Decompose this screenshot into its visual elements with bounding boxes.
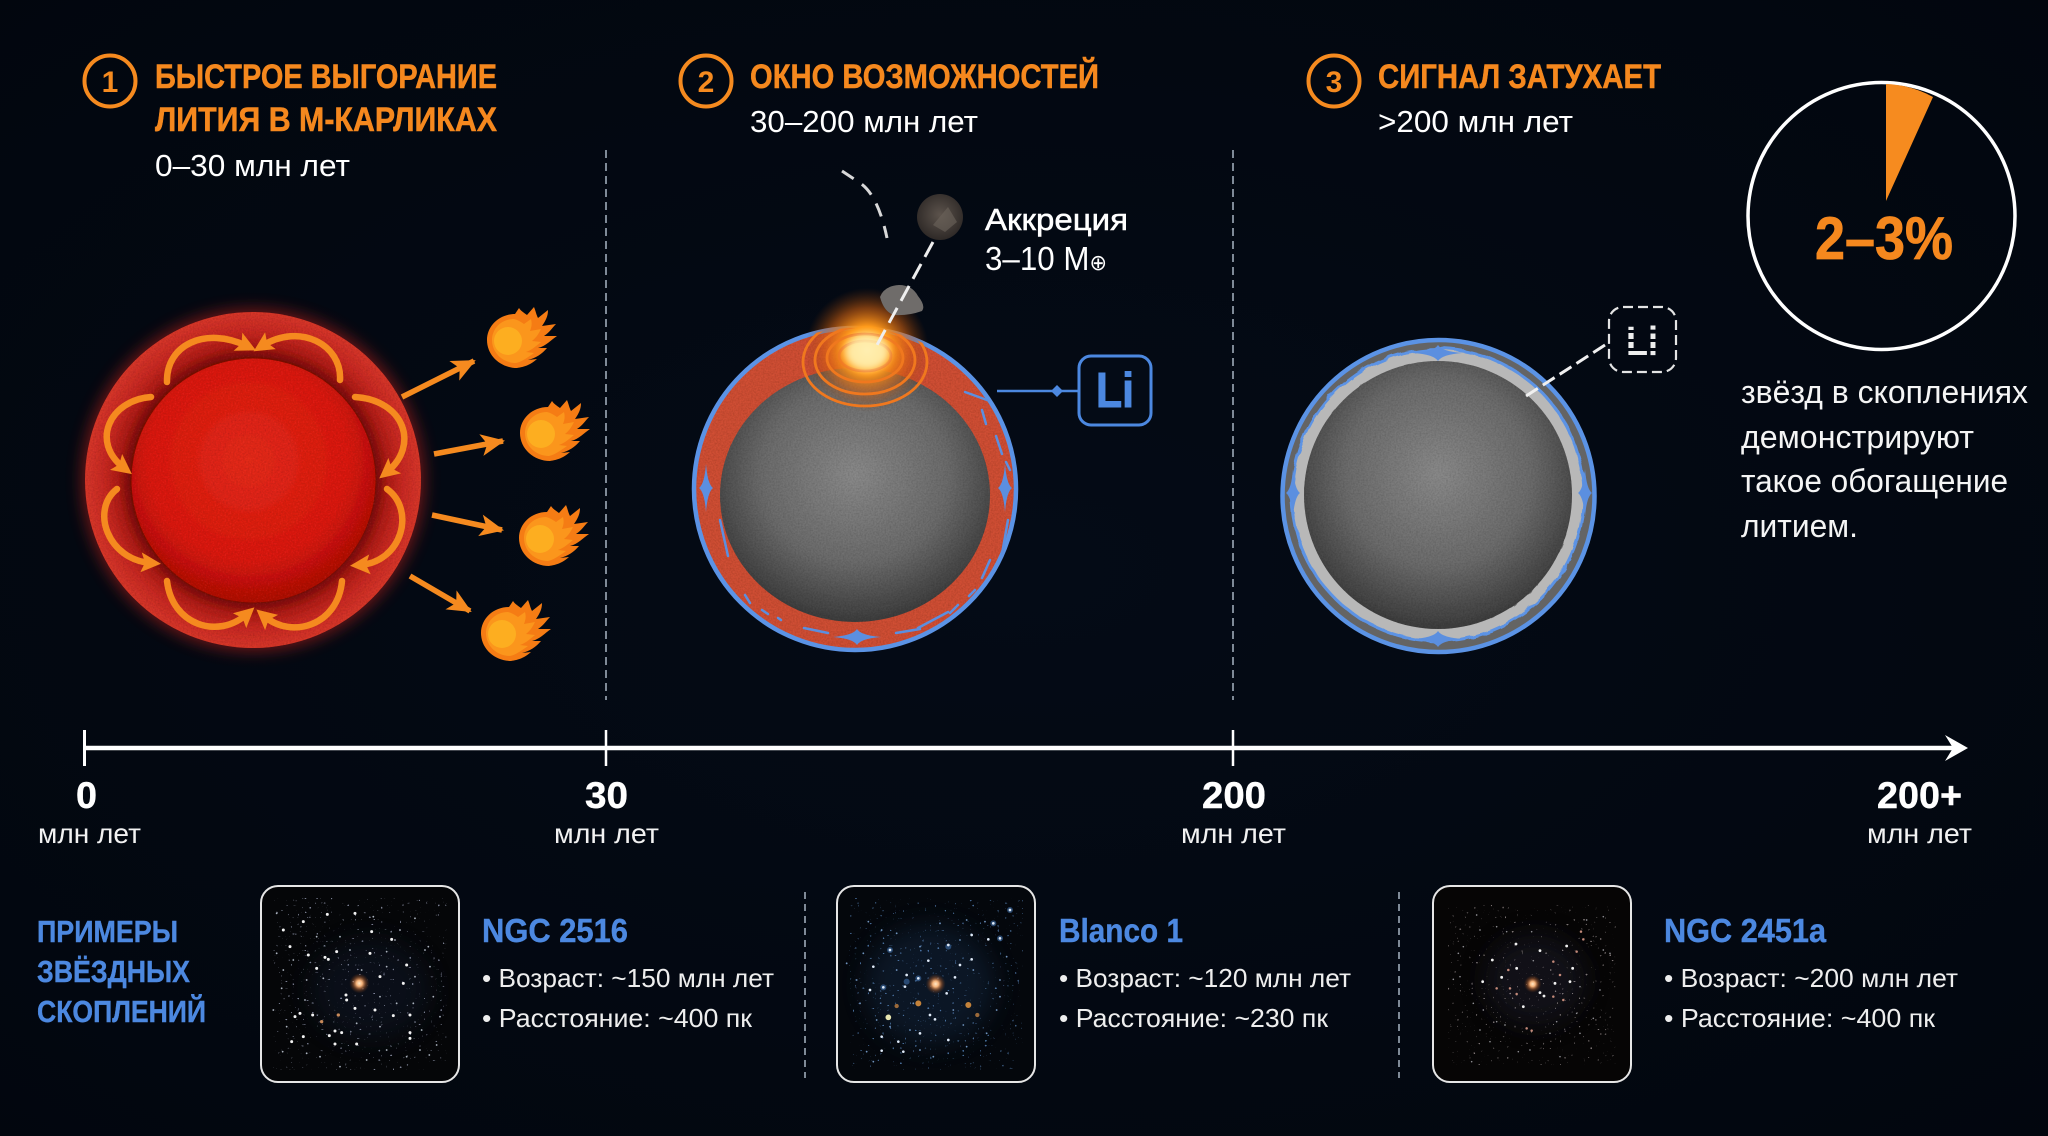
tick 200+ [1867,775,1972,849]
star outer glow [82,309,424,651]
heading: stage 2 title: ОКНО ВОЗМОЖНОСТЕЙ [750,57,1099,96]
number badge 1 [84,56,136,106]
tick 30: 30 [585,775,628,816]
text: stat description: демонстрируют [1741,419,1974,455]
convective shell [85,312,421,648]
tick 200+: 200+ [1877,775,1962,816]
timeline labels [38,775,1972,849]
tick 200+: млн лет [1867,818,1972,849]
icons: burning fireballs [481,307,590,661]
red enriched shell [694,328,1016,650]
text: stat description: такое обогащение [1741,463,2008,499]
tick 30 [554,775,659,849]
heading: cluster examples: ЗВЁЗДНЫХ [37,954,190,989]
heading: cluster examples [37,914,206,1029]
text: stat description: литием. [1741,508,1858,544]
cluster name: Blanco 1 [1059,912,1183,949]
heading: stage 1 title [155,58,497,139]
illustration: star with fading lithium signal [1282,340,1594,652]
heading: cluster examples: ПРИМЕРЫ [37,914,178,949]
blue sparks [1286,345,1592,647]
cluster name: NGC 2516 [482,912,628,949]
faint blue line in the shell [1292,349,1584,641]
number badge 3 [1308,56,1360,106]
star core [132,358,376,602]
cluster facts: • Возраст: ~120 млн лет [1059,963,1351,993]
blue outline [694,328,1016,650]
orange wedge [1886,84,1933,201]
callout: Li detected [997,356,1151,425]
tick 0 [38,775,141,849]
cluster facts: • Возраст: ~200 млн лет [1664,963,1958,993]
lithium sparks in the shell [699,392,1012,645]
impact ripple rings [803,318,927,406]
age range 0–30: 0–30 млн лет [155,148,350,183]
stat: pie with 2–3% [1748,82,2015,350]
number badge 1: 1 [102,66,118,99]
card: NGC 2451a [1433,886,1958,1082]
card: NGC 2516 [261,886,774,1082]
outer gray shell [1282,340,1594,652]
cluster facts: • Расстояние: ~400 пк [1664,1003,1936,1033]
cluster facts: • Расстояние: ~230 пк [1059,1003,1329,1033]
star field image [837,886,1035,1082]
bright impact point [845,334,889,370]
heading: stage 1 title: ЛИТИЯ В М-КАРЛИКАХ [155,101,497,139]
gray core [1304,361,1572,629]
tick 200: 200 [1202,775,1266,816]
illustration: star with accretion enrichment [694,288,1016,650]
label: accretion mass [985,202,1128,277]
text: stat description: звёзд в скоплениях [1741,374,2028,410]
heading: stage 1 title: БЫСТРОЕ ВЫГОРАНИЕ [155,58,497,96]
heading: cluster examples: СКОПЛЕНИЙ [37,993,206,1029]
broken debris [880,285,923,315]
panel: stage 1 heading [84,56,497,183]
percentage value: 2–3% [1815,205,1953,272]
card: Blanco 1 [837,886,1351,1082]
text: stat description [1741,374,2028,544]
cluster facts: • Возраст: ~150 млн лет [482,963,774,993]
illustration: red M-dwarf with convection [82,309,424,651]
gray core [720,368,990,622]
number badge 2 [680,56,732,106]
infall dashed path [877,242,933,345]
star field image [261,886,459,1082]
icons: accreting planet debris [842,171,963,345]
curved trajectory [842,171,887,238]
callout: faded Li [1523,307,1676,398]
cluster name: NGC 2451a [1664,912,1827,949]
star field image [1433,886,1631,1082]
age range >200: >200 млн лет [1378,104,1573,139]
arrows: lithium loss outward [402,361,503,611]
callout: Li detected: Li [1096,364,1134,418]
panel: stage 3 heading [1308,56,1661,139]
number badge 3: 3 [1326,66,1342,99]
tick 30: млн лет [554,818,659,849]
label: accretion mass: Аккреция [985,202,1128,237]
pale ring [1298,355,1578,635]
pie circle [1748,82,2015,350]
tick 200 [1181,775,1286,849]
timeline axis [84,730,1968,766]
cluster facts [1664,963,1958,1033]
label: accretion mass: 3–10 M⊕ [985,240,1107,277]
cluster facts [1059,963,1351,1033]
tick 0: 0 [76,775,97,816]
heading: stage 3 title: СИГНАЛ ЗАТУХАЕТ [1378,58,1661,96]
cluster facts [482,963,774,1033]
panel: stage 2 heading [680,56,1099,139]
cluster facts: • Расстояние: ~400 пк [482,1003,753,1033]
tick 0: млн лет [38,818,141,849]
callout: faded Li: Li [1626,318,1658,364]
convection arrows [104,336,404,627]
impact glow [805,288,929,412]
tick 200: млн лет [1181,818,1286,849]
age range 30–200: 30–200 млн лет [750,104,978,139]
number badge 2: 2 [698,66,714,99]
planet [917,194,963,240]
